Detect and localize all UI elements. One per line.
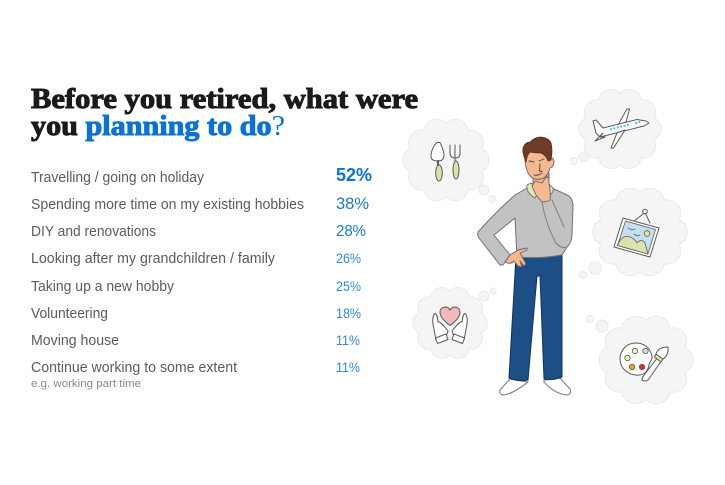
row: travelling: Travelling / going on holiday [31,170,205,186]
row: existing hobbies: Spending more time on my existing hobbies [31,197,304,213]
character: thinking man [478,137,573,395]
chin hand [532,173,550,202]
sweater arm folds [542,200,567,248]
shoes [500,378,571,395]
title: Before you retired, what were [31,83,418,115]
title: you planning to do? [31,110,285,142]
trousers [509,254,562,381]
head [525,146,554,179]
icon: hands holding heart [433,307,467,344]
hip hand [505,248,527,267]
hair [523,137,552,162]
row: moving house: Moving house [31,333,119,349]
row: continue working: e.g. working part time [31,378,141,390]
icon: palette and brush [620,343,668,381]
row: volunteering: Volunteering [31,306,108,322]
face features [529,159,544,175]
icon: framed landscape [614,209,659,257]
row: DIY: 28% [336,223,366,240]
row: moving house: 11% [336,332,360,348]
row: new hobby [31,278,361,295]
collar [527,183,553,198]
row: existing hobbies: 38% [336,195,369,213]
row: new hobby: Taking up a new hobby [31,279,175,295]
row: continue working: 11% [336,359,360,375]
thought cloud: caring [413,288,496,358]
neck [533,170,547,188]
row: volunteering: 18% [336,305,361,321]
title [31,83,418,142]
row: continue working [31,359,360,390]
icon: trowel and fork [431,142,460,181]
thought cloud: painting [586,316,693,404]
row: travelling: 52% [336,164,372,185]
thought cloud: gardening [403,119,496,202]
row: travelling [31,164,372,186]
thought cloud: picture frame [580,188,687,278]
row: grandchildren: Looking after my grandchildren / family [31,251,276,267]
row: continue working: Continue working to some extent [31,360,237,376]
row: new hobby: 25% [336,278,361,294]
row: DIY: DIY and renovations [31,224,156,240]
row: grandchildren: 26% [336,250,361,266]
row: moving house [31,332,360,349]
survey list [31,164,372,390]
row: volunteering [31,305,361,322]
sweater [478,188,573,265]
icon: aeroplane [593,109,649,148]
thought cloud: travel [570,89,661,169]
row: DIY [31,223,366,240]
